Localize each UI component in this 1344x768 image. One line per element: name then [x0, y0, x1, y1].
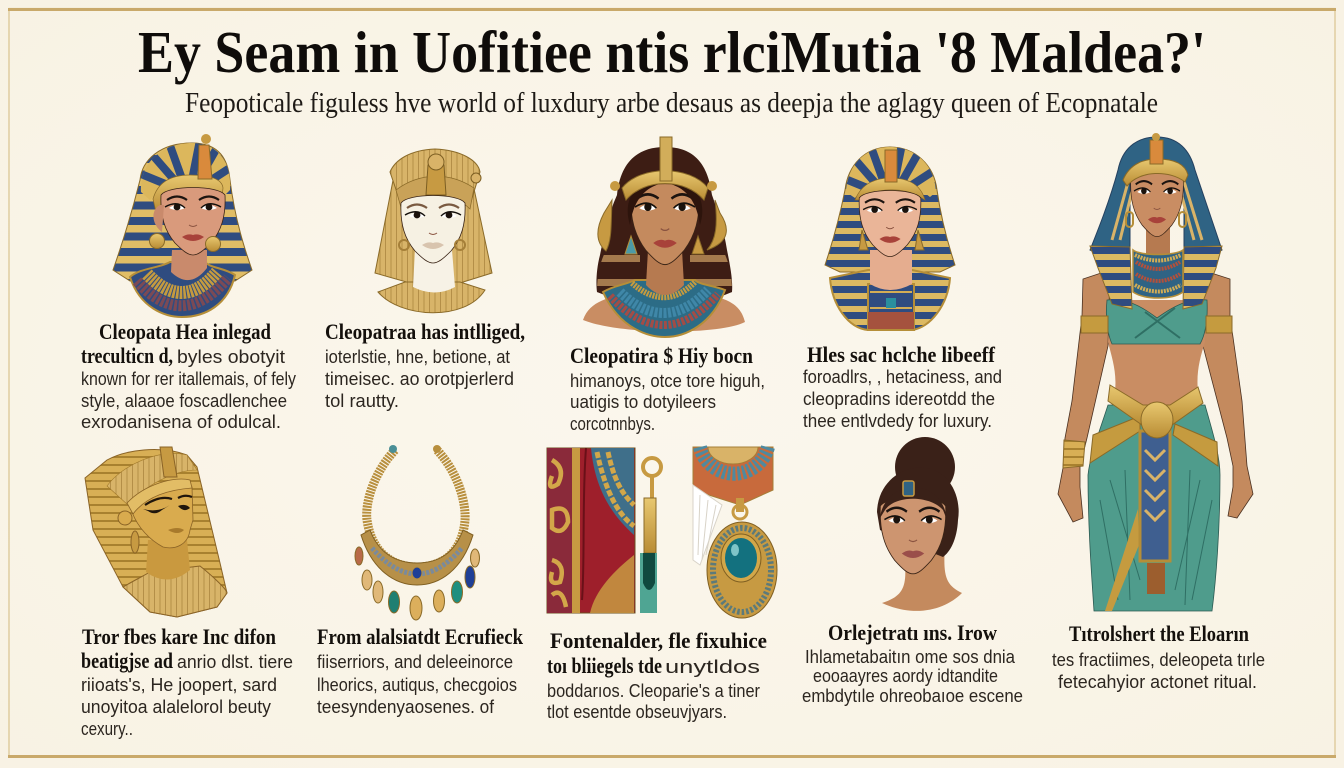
text block 8: [547, 628, 767, 722]
text block 3: uatigis to dotyileers: [570, 391, 716, 412]
lappets: [1090, 246, 1132, 309]
text block 1: byles obotyit: [177, 346, 285, 367]
text block 3: himanoys, otce tore higuh,: [570, 370, 765, 391]
portrait 1: striped nemes headdress: [113, 134, 252, 317]
text block 3: [570, 343, 765, 434]
text block 1: Cleopata Hea inlegad: [99, 319, 271, 344]
text block 8: Fontenalder, fle fixuhice: [550, 628, 767, 653]
text block 9: eooaayres aordy idtandite: [813, 665, 998, 686]
text block 1: known for rer itallemais, of fely: [81, 368, 297, 389]
text block 5: figure caption: tes fractiimes, deleopeta tırle: [1052, 649, 1265, 670]
text block 4: thee entlvdedy for luxury.: [803, 410, 992, 431]
text block 1: treculticn d,: [81, 343, 173, 368]
text block 8: toı bliiegels tde: [547, 653, 662, 678]
text block 5: figure caption: Tıtrolshert the Eloarın: [1069, 621, 1249, 646]
text block 1: [81, 319, 297, 432]
right arm: [1202, 270, 1253, 518]
text block 4: foroadlrs, , hetaciness, and: [803, 366, 1002, 387]
text block 3: corcotnnbys.: [570, 413, 655, 434]
text block 2: ioterlstie, hne, betione, at: [325, 346, 510, 367]
text block 7: fiiserriors, and deleeinorce: [317, 651, 513, 672]
text block 8: unytldos: [665, 656, 760, 677]
portrait 2: gold line headdress: [375, 149, 492, 313]
text block 8: boddarıos. Cleoparie's a tiner: [547, 680, 760, 701]
title: Ey Seam in Uofitiee ntis rlciMutia '8 Maldea?': [138, 19, 1206, 85]
text block 4: cleopradins idereotdd the: [803, 388, 995, 409]
text block 2: tol rautty.: [325, 390, 399, 411]
text block 6: riioats's, He joopert, sard: [81, 674, 277, 695]
text block 7: lheorics, autiqus, checgoios: [317, 674, 517, 695]
text block 8: tlot esentde obseuvjyars.: [547, 701, 727, 722]
jewelled medallion: [693, 447, 777, 618]
face: [1131, 172, 1183, 237]
full figure: queen in teal dress: [1058, 133, 1253, 611]
text block 7: teesyndenyaosenes. of: [317, 696, 495, 717]
ornate red textile panel: [547, 448, 635, 613]
text block 3: Cleopatira $ Hiy bocn: [570, 343, 753, 368]
subtitle: Feopoticale figuless hve world of luxdury arbe desaus as deepja the aglagy queen of Ecopnatale: [185, 87, 1158, 119]
text block 6: unoyitoa alalelorol beuty: [81, 696, 272, 717]
text block 5: figure caption: fetecahyior actonet ritual.: [1058, 671, 1257, 692]
text block 1: exrodanisena of odulcal.: [81, 411, 281, 432]
portrait 4: striped nemes with lappets: [825, 144, 955, 330]
gold and teal pin: [640, 458, 661, 613]
text block 9: Ihlametabaitın ome sos dnia: [805, 646, 1016, 667]
text block 1: style, alaaoe foscadlenchee: [81, 390, 287, 411]
text block 6: beatigjse ad: [81, 648, 173, 673]
text block 6: Tror fbes kare Inc difon: [82, 624, 276, 649]
text block 6: cexury..: [81, 718, 133, 739]
skirt: [1088, 405, 1220, 611]
headdress drape: [1090, 137, 1222, 262]
left arm: [1058, 270, 1110, 522]
text block 2: timeisec. ao orotpjerlerd: [325, 368, 514, 389]
portrait 3: dark hair with gold crown: [583, 137, 745, 337]
belt and sash: [1090, 416, 1218, 466]
text block 5: figure caption: [1052, 621, 1265, 692]
text block 9: [802, 620, 1023, 706]
text block 2: Cleopatraa has intlliged,: [325, 319, 525, 344]
text block 2: [325, 319, 525, 411]
necklace with gem pendants: [355, 445, 480, 620]
text block 6: anrio dlst. tiere: [177, 651, 293, 672]
text block 4: [803, 342, 1002, 431]
golden mask: [85, 447, 227, 617]
text block 9: Orlejetratı ıns. Irow: [828, 620, 997, 645]
portrait: woman with hair bun: [877, 437, 962, 611]
top: [1106, 300, 1207, 344]
neck and necklace: [1146, 225, 1170, 255]
torso: [1108, 300, 1205, 405]
text block 9: embdytıle ohreobaıoe escene: [802, 685, 1023, 706]
armbands and bracelet: [1081, 316, 1108, 333]
text block 7: From alalsiatdt Ecrufieck: [317, 624, 524, 649]
text block 7: [317, 624, 524, 717]
text block 6: [81, 624, 293, 739]
text block 4: Hles sac hclche libeeff: [807, 342, 996, 367]
